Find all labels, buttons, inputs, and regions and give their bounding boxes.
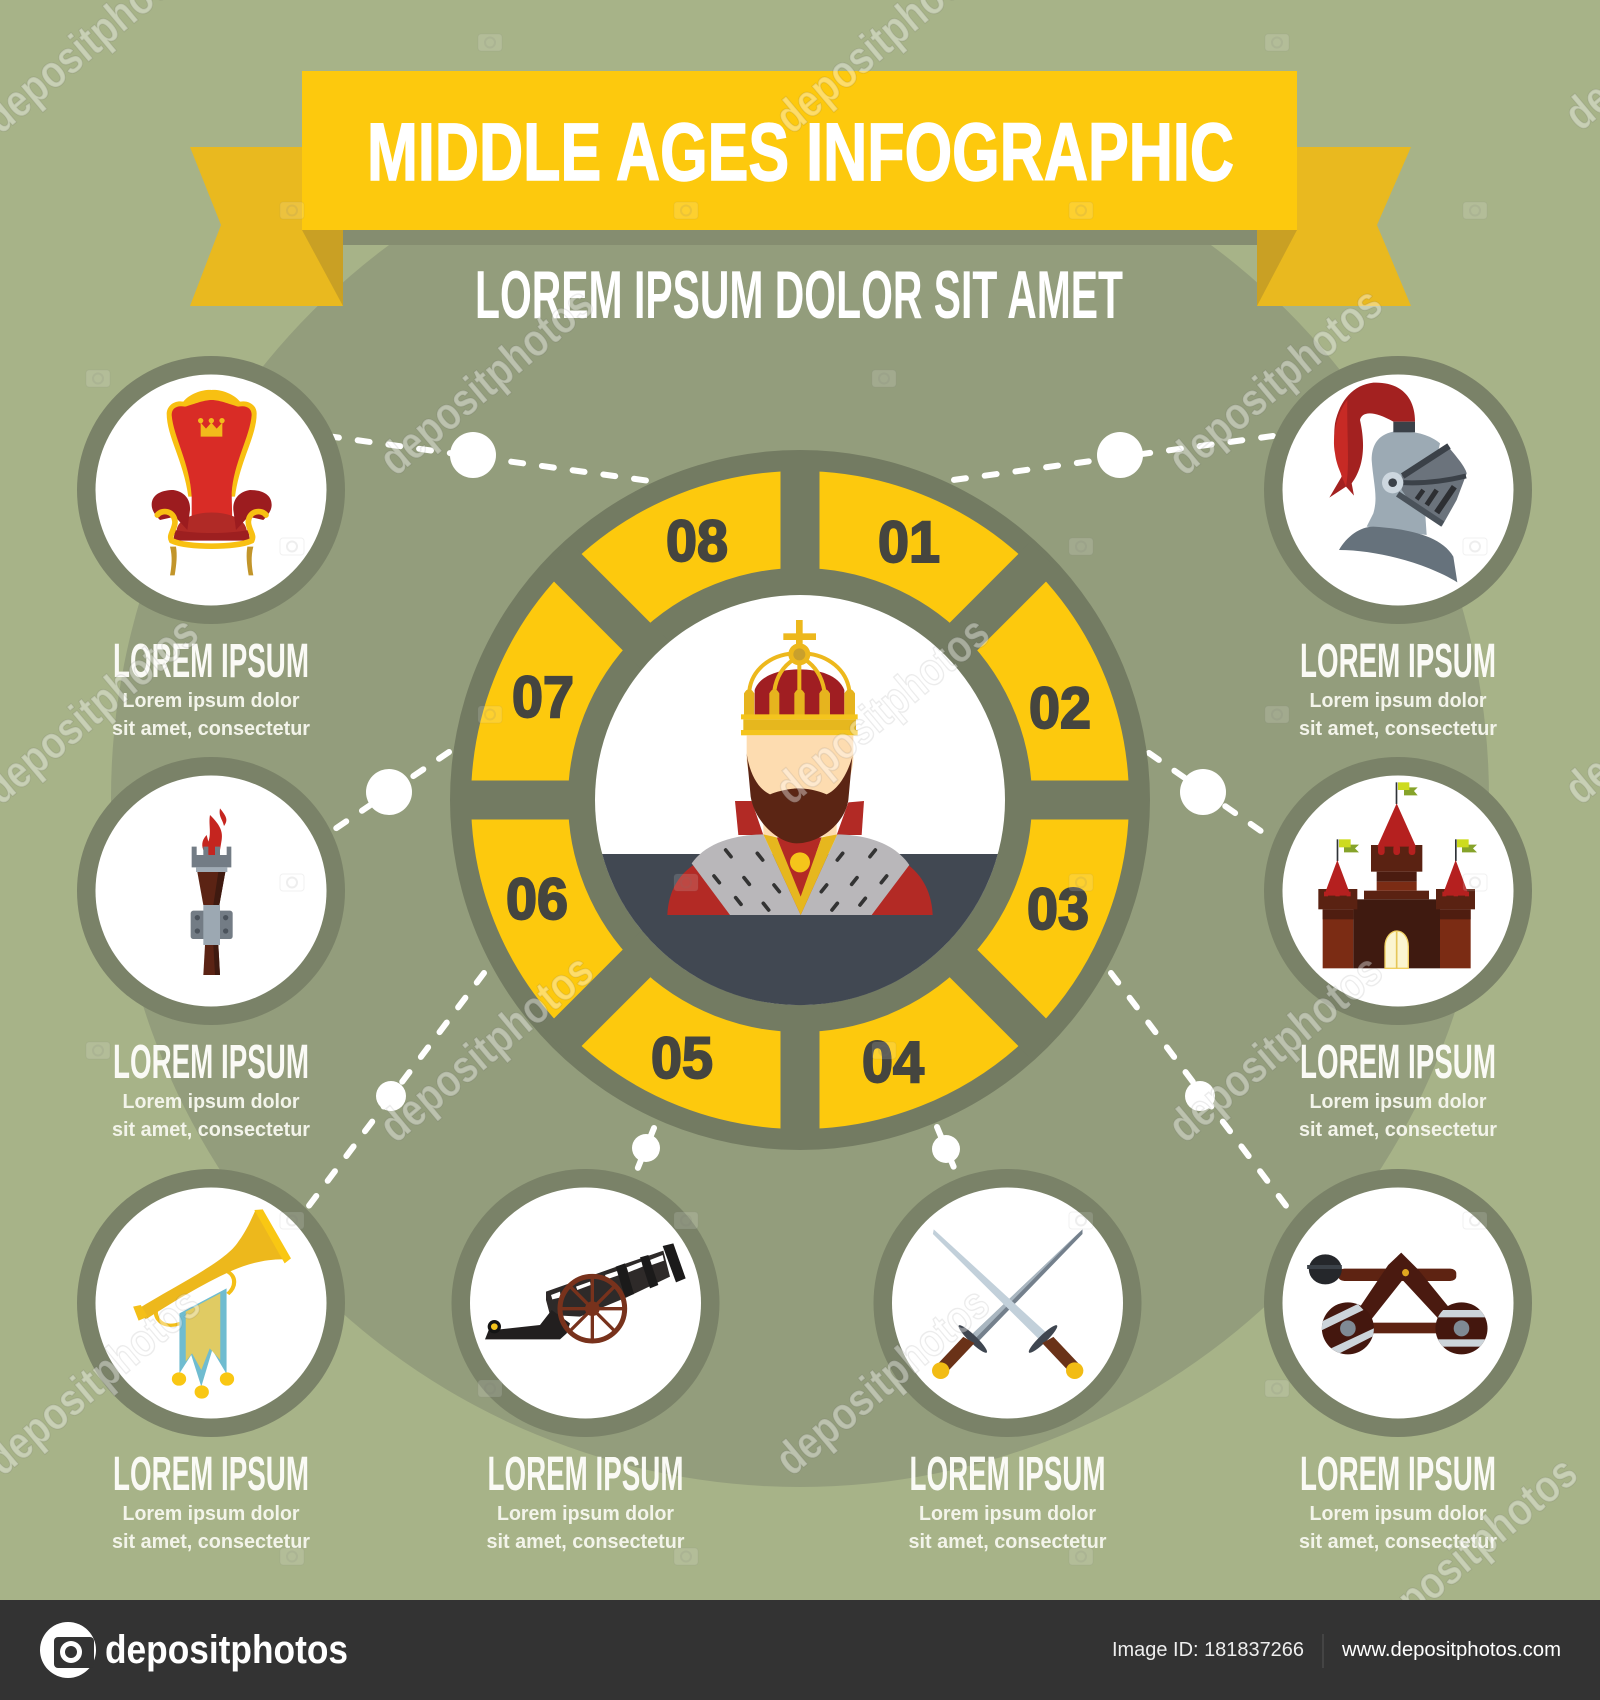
label <box>1299 635 1497 740</box>
panel: trumpet (bottom left) <box>77 1169 345 1553</box>
segment number 03: 03 <box>1027 877 1089 942</box>
label <box>486 1448 685 1553</box>
connector 8 <box>327 432 650 481</box>
label <box>112 1448 310 1553</box>
segment number 06: 06 <box>506 867 568 932</box>
segment number 05: 05 <box>651 1026 713 1091</box>
segment number 08: 08 <box>666 509 728 574</box>
icon: crossed swords <box>932 1229 1083 1379</box>
segment number 07: 07 <box>512 665 574 730</box>
label: Lorem ipsum dolor <box>122 1503 300 1525</box>
label: Lorem ipsum dolor <box>1310 1091 1487 1113</box>
label: sit amet, consectetur <box>908 1531 1107 1553</box>
watermarks: depositphotos <box>369 944 603 1152</box>
label <box>112 635 310 740</box>
icon: trumpet with banner <box>133 1209 291 1399</box>
watermarks: depositphotos <box>1158 944 1392 1152</box>
title ribbon <box>190 71 1411 306</box>
footer logo icon <box>40 1622 96 1678</box>
label: Lorem ipsum dolor <box>497 1503 674 1525</box>
label: LOREM IPSUM <box>113 1036 309 1089</box>
king portrait disc <box>595 595 1005 1005</box>
label: Lorem ipsum dolor <box>1310 1503 1487 1525</box>
connector 3 <box>1111 973 1290 1211</box>
label: LOREM IPSUM <box>488 1448 684 1501</box>
icon: catapult <box>1307 1253 1490 1355</box>
watermark camera icons <box>86 34 1487 1565</box>
connector 5 <box>632 1128 660 1170</box>
label <box>1299 1036 1497 1141</box>
label: sit amet, consectetur <box>486 1531 685 1553</box>
background circle <box>111 109 1489 1487</box>
subtitle: LOREM IPSUM DOLOR SIT AMET <box>475 257 1123 333</box>
label: Lorem ipsum dolor <box>919 1503 1096 1525</box>
watermarks: depositphotos <box>1158 277 1392 485</box>
image id: Image ID: 181837266 <box>1112 1639 1304 1661</box>
label <box>1299 1448 1497 1553</box>
title: MIDDLE AGES INFOGRAPHIC <box>367 107 1234 198</box>
segment number 04: 04 <box>862 1030 924 1095</box>
connector 4 <box>932 1127 960 1170</box>
label: sit amet, consectetur <box>112 1531 310 1553</box>
connectors <box>305 432 1290 1211</box>
panel: catapult (bottom right) <box>1264 1169 1532 1553</box>
label: sit amet, consectetur <box>1299 1119 1497 1141</box>
label: sit amet, consectetur <box>112 718 310 740</box>
ribbon right tail <box>1257 147 1411 306</box>
label: LOREM IPSUM <box>113 635 309 688</box>
panel: castle (middle right) <box>1264 757 1532 1141</box>
panel: crossed swords (bottom third) <box>874 1169 1142 1553</box>
icon: castle <box>1318 782 1477 968</box>
icon: torch <box>191 808 233 975</box>
connector 1 <box>946 432 1273 481</box>
label: sit amet, consectetur <box>1299 718 1497 740</box>
connector 6 <box>305 973 484 1211</box>
ribbon shadow <box>343 230 1257 245</box>
ribbon folds <box>302 230 1297 306</box>
icon: cannon <box>485 1243 686 1341</box>
label: sit amet, consectetur <box>1299 1531 1497 1553</box>
label: LOREM IPSUM <box>113 1448 309 1501</box>
ribbon main band <box>302 71 1297 230</box>
icon: king <box>667 620 933 915</box>
segment number 02: 02 <box>1029 676 1091 741</box>
footer logo text: depositphotos <box>105 1628 348 1672</box>
label: Lorem ipsum dolor <box>122 690 300 712</box>
label: Lorem ipsum dolor <box>1310 690 1487 712</box>
panel: cannon (bottom second) <box>452 1169 720 1553</box>
label <box>908 1448 1107 1553</box>
connector 2 <box>1149 753 1268 836</box>
watermarks: depositphotos <box>765 1277 999 1485</box>
label <box>112 1036 310 1141</box>
icon: knight helmet <box>1329 383 1467 582</box>
watermarks: depositphotos <box>369 277 603 485</box>
panel: knight helmet (top right) <box>1264 356 1532 740</box>
label: sit amet, consectetur <box>112 1119 310 1141</box>
central wheel <box>450 450 1150 1150</box>
label: LOREM IPSUM <box>910 1448 1106 1501</box>
panel: torch (middle left) <box>77 757 345 1141</box>
icon: throne <box>152 390 272 575</box>
connector 7 <box>329 752 449 833</box>
label: Lorem ipsum dolor <box>122 1091 300 1113</box>
watermarks: depositphotos <box>765 606 999 814</box>
ribbon left tail <box>190 147 343 306</box>
panel: throne (top left) <box>77 356 345 740</box>
segment number 01: 01 <box>878 510 940 575</box>
website: www.depositphotos.com <box>1341 1639 1561 1661</box>
footer bar <box>0 1600 1600 1700</box>
